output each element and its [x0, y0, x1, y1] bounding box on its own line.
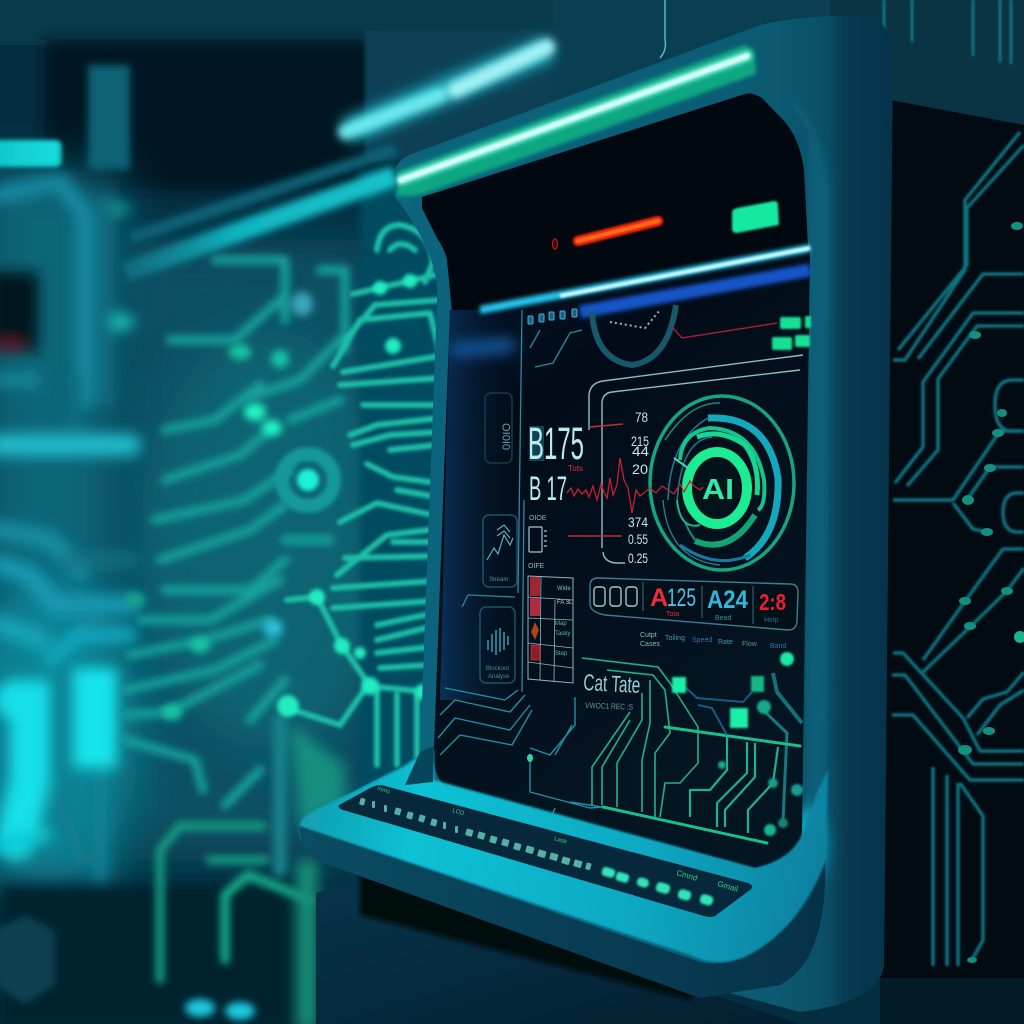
readout 28: 2:8: [759, 589, 786, 615]
frequency numbers: 78: [635, 409, 648, 425]
metric readout one: Tots: [568, 464, 583, 473]
metric readout one: B175: [528, 418, 584, 469]
readout A24: A24: [707, 586, 748, 614]
icon box wave one: [483, 515, 517, 587]
readout strip: [590, 578, 798, 630]
nav chips: [528, 309, 577, 324]
keypad keys: [359, 798, 592, 870]
right circuit nodes: [958, 222, 1024, 963]
frame outlines: [589, 355, 803, 563]
frequency numbers: 0.55: [628, 531, 648, 547]
frequency numbers: 374: [628, 514, 648, 530]
thick green traces: [603, 727, 800, 843]
screen title: [583, 669, 641, 712]
keypad labels: Lask: [553, 836, 568, 846]
control shelf: [300, 746, 828, 998]
frequency numbers: 44: [632, 443, 649, 459]
readout strip: 125: [667, 584, 696, 612]
red waveform: [567, 458, 703, 513]
background light beams: [0, 47, 550, 272]
plinth: [316, 870, 800, 1024]
column labels: Speed: [692, 637, 712, 644]
column labels: Toiling: [665, 635, 685, 642]
red indicator dot: [552, 239, 558, 249]
red callout lines: [568, 424, 623, 536]
blue connector traces: [685, 687, 752, 735]
plinth label: MILZ: [341, 949, 391, 979]
frequency numbers: [628, 409, 649, 566]
right circuit traces: [892, 132, 1024, 966]
terminal body: [299, 15, 893, 1012]
frequency numbers: 0.25: [628, 550, 648, 566]
screen node: [527, 754, 533, 762]
status table: [528, 576, 573, 683]
status table: FA 3L: [557, 600, 573, 606]
keypad labels: Gmail: [716, 879, 739, 894]
right side panel: [880, 0, 1024, 1024]
frequency numbers: 20: [632, 461, 648, 477]
readout captions: Bead: [715, 615, 731, 622]
screen title: Cat Tate: [583, 669, 641, 698]
readout captions: [666, 611, 779, 624]
metric readout two: B 17: [529, 470, 567, 508]
icon box wave two: [480, 607, 515, 683]
cyan light strip: [480, 248, 810, 310]
readout captions: Tota: [666, 611, 679, 618]
column labels: Band: [770, 643, 786, 650]
keypad labels: [376, 786, 739, 894]
gear node: [282, 454, 334, 506]
red status bar: [578, 221, 658, 241]
column labels: Cutpt: [640, 632, 657, 639]
green status block: [732, 201, 779, 233]
status table: Step: [555, 651, 568, 657]
column labels: [640, 632, 786, 650]
green screen traces: [582, 658, 802, 833]
green light bar: [397, 45, 756, 197]
small label: OIOE: [529, 515, 547, 522]
column labels: Rate: [718, 639, 733, 646]
column labels: Cases: [640, 641, 660, 648]
gauge: [592, 305, 676, 365]
status table: Tasky: [555, 631, 570, 637]
wire above terminal: [660, 0, 665, 58]
keypad strip: [338, 785, 752, 917]
gauge connector line: [672, 323, 777, 338]
metric readout one: [528, 418, 584, 473]
keypad labels: Cmnd: [675, 868, 698, 883]
blue glow band: [580, 270, 810, 312]
upper dark display: [422, 94, 808, 312]
blurred background dots: [125, 292, 313, 1020]
status table: Wide: [557, 586, 571, 592]
sidebar rules: [462, 310, 582, 692]
blurred far circuit traces: [125, 260, 345, 980]
keypad labels: LCD: [451, 808, 465, 817]
icon box wave two: Analyse: [488, 674, 510, 680]
small device icon: [529, 527, 547, 552]
icon box wave one: Stream: [489, 577, 508, 583]
icon box top: 0I0IO: [501, 423, 513, 450]
column labels: Flow: [742, 641, 758, 648]
small label two: OIFE: [528, 563, 545, 570]
mid circuit traces: [287, 225, 440, 765]
readout captions: Help: [764, 617, 779, 624]
status table: Map: [555, 621, 567, 627]
main touchscreen: [434, 248, 811, 868]
icon box wave two: Blockout: [486, 666, 509, 672]
screen title: VWOC1 REC :S: [585, 701, 633, 712]
icon box top: [485, 393, 513, 463]
left screen traces: [438, 688, 602, 815]
green status chips: [772, 316, 811, 350]
green screen nodes: [672, 652, 803, 836]
frequency numbers: 215: [631, 433, 649, 449]
mid circuit nodes: [277, 274, 431, 717]
readout A125: A: [650, 584, 668, 612]
AI dial: [650, 396, 794, 570]
AI label: AI: [702, 474, 734, 506]
green haze patches: [290, 725, 345, 1024]
blurred left equipment: [0, 182, 134, 875]
keypad labels: mmc: [376, 786, 391, 796]
